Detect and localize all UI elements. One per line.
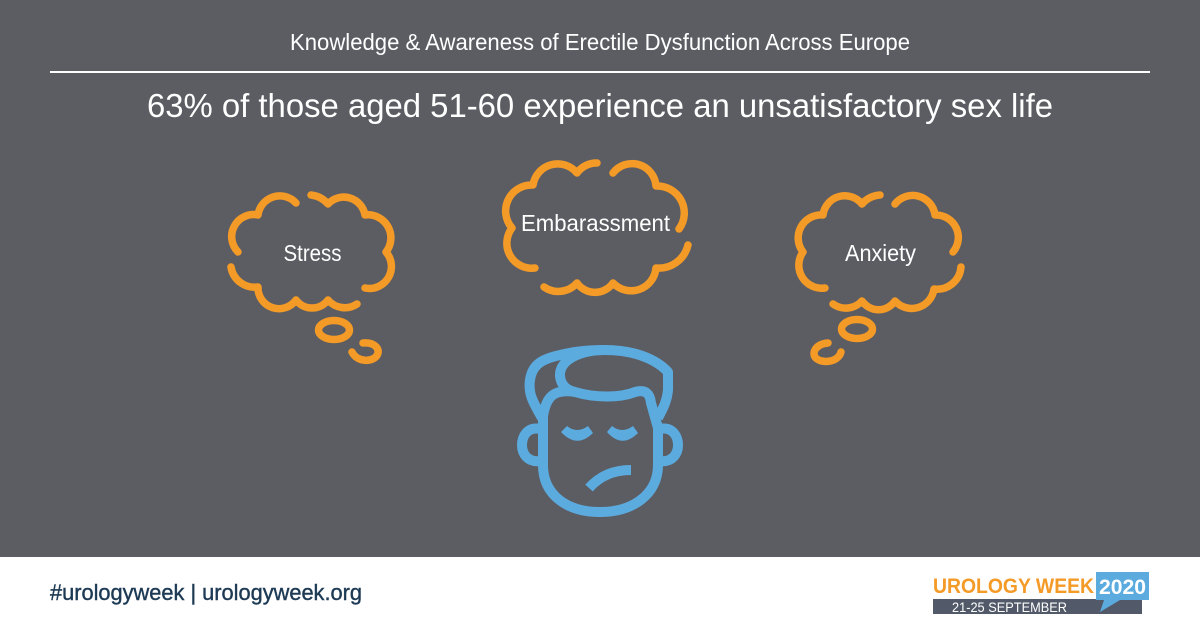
left eye xyxy=(561,426,593,441)
logo wordmark: UROLOGY WEEK xyxy=(933,575,1094,598)
logo year: 2020 xyxy=(1099,576,1146,599)
left ear xyxy=(522,429,541,461)
hair xyxy=(530,350,668,418)
thought bubble: Stress xyxy=(231,195,391,360)
logo dates: 21-25 SEPTEMBER xyxy=(952,599,1067,615)
right ear xyxy=(659,429,678,461)
right eye xyxy=(607,426,638,441)
thought bubble: Anxiety xyxy=(798,195,961,361)
main headline: 63% of those aged 51-60 experience an unsatisfactory sex life xyxy=(147,88,1053,125)
thought bubble: Embarassment xyxy=(506,163,688,292)
footer band xyxy=(0,557,1200,630)
hair swirl xyxy=(560,350,605,392)
label: Anxiety: Anxiety xyxy=(845,240,916,266)
subtitle heading: Knowledge & Awareness of Erectile Dysfunction Across Europe xyxy=(290,29,910,55)
label: Stress: Stress xyxy=(284,240,342,266)
icon: sad man face xyxy=(522,350,678,512)
logo: Urology Week 2020 xyxy=(933,572,1149,615)
label: Embarassment: Embarassment xyxy=(521,210,671,236)
mouth xyxy=(589,470,631,488)
footer hashtag and url: #urologyweek | urologyweek.org xyxy=(50,580,362,605)
face outline xyxy=(543,391,658,512)
